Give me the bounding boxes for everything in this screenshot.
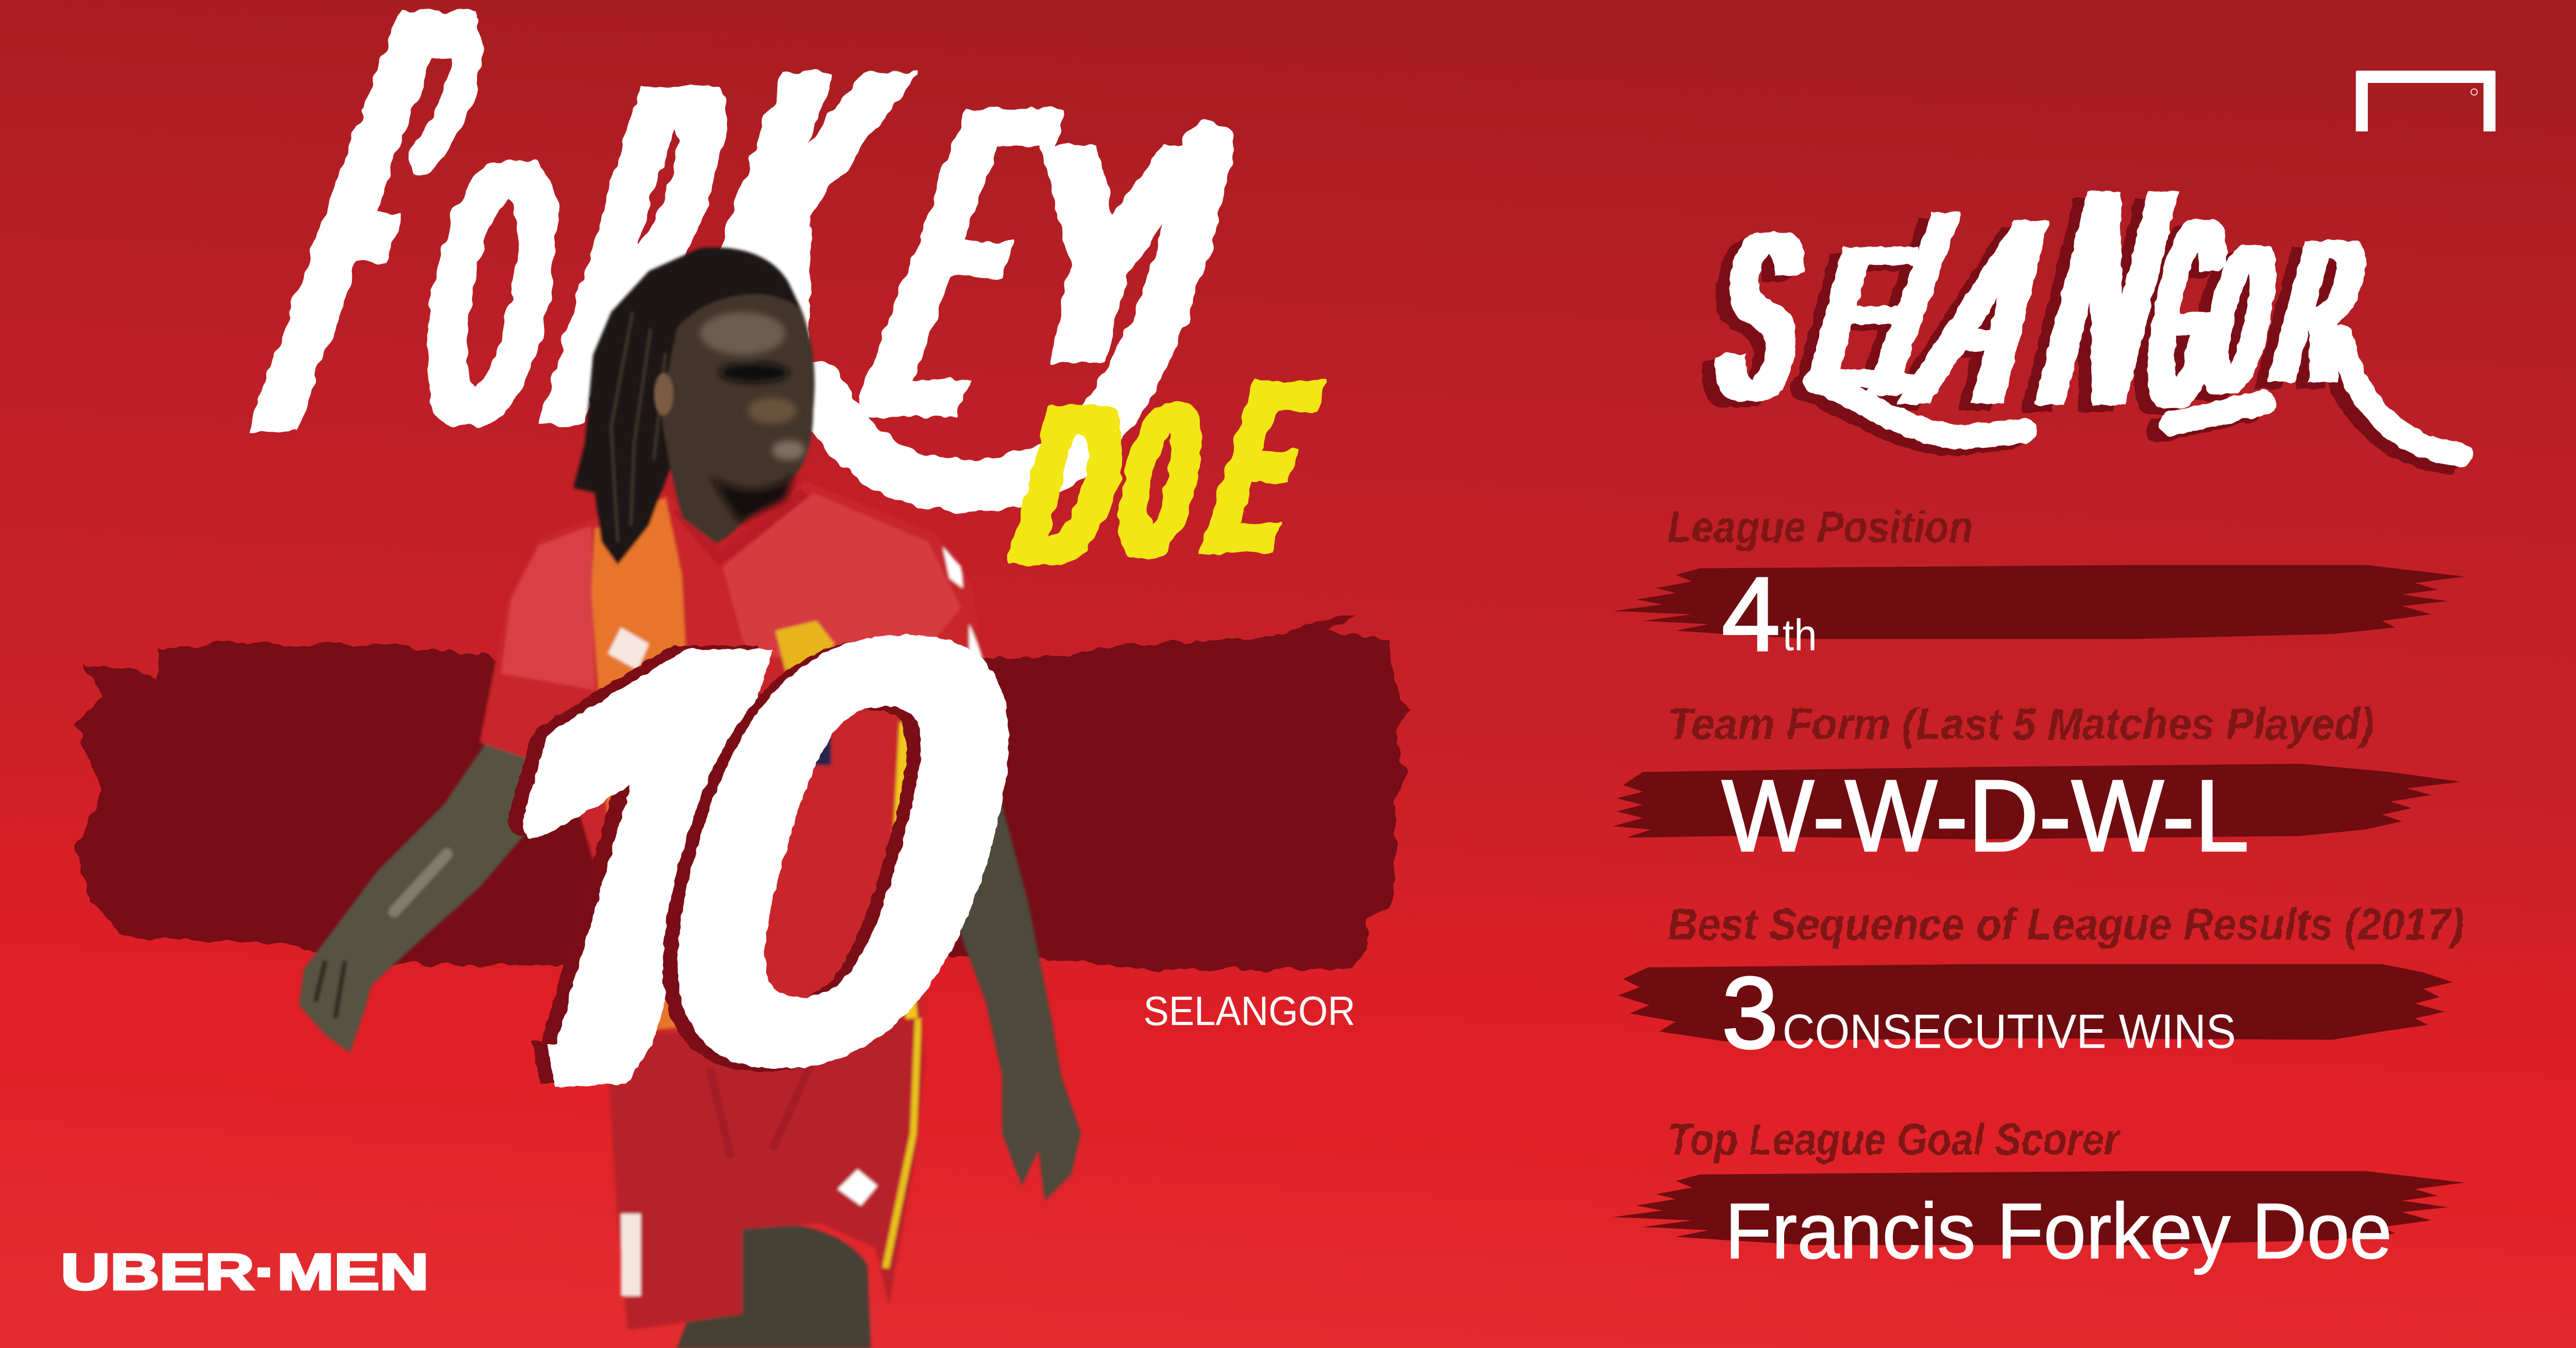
trademark (2471, 89, 2477, 95)
shadow E: E (1783, 211, 1914, 435)
brow and eyes (720, 363, 789, 383)
leg (677, 1224, 871, 1348)
cheek (748, 398, 797, 424)
shadow O: O (2177, 211, 2275, 442)
letter Y: Y (981, 79, 1228, 428)
side stripe (897, 723, 912, 1018)
letter O: O (1103, 360, 1217, 599)
left shoulder highlight (501, 525, 595, 690)
letter E: E (826, 14, 1092, 510)
shadow G: G (2121, 173, 2226, 467)
shadow letters (1695, 133, 2368, 476)
brush band (1613, 764, 2461, 839)
crest (775, 621, 835, 677)
value suffix: th (1783, 611, 1817, 660)
selangor caption: SELANGOR (1143, 988, 1355, 1034)
white shoulder trim (943, 547, 982, 681)
stat: top scorer (1613, 1115, 2464, 1275)
dark brush band behind player (74, 616, 1410, 969)
letter O: O (403, 86, 580, 499)
facial shading (700, 312, 805, 522)
title: Forkey (249, 8, 1234, 514)
value: Francis Forkey Doe (1725, 1187, 2392, 1275)
label: Best Sequence of League Results (2017) (1668, 900, 2464, 949)
brush band (1618, 964, 2453, 1042)
left arm (299, 742, 558, 1053)
sponsor (720, 723, 832, 765)
jersey (480, 481, 1006, 1035)
letter E: E (1184, 329, 1339, 604)
shorts stripe (886, 1015, 919, 1268)
brush band (1613, 1171, 2464, 1245)
uber men logo: UBER·MEN (61, 1243, 429, 1300)
white L: L (1848, 157, 2009, 450)
Y swash tail (817, 148, 1208, 486)
hair (573, 247, 802, 565)
white tails (1816, 337, 2461, 455)
title: Doe (994, 329, 1339, 612)
goal logo (2356, 71, 2496, 131)
right arm (945, 764, 1081, 1201)
letter D: D (994, 357, 1148, 612)
orange panel (591, 498, 690, 1032)
shadow A: A (1869, 171, 2087, 465)
shadow L: L (1834, 164, 1996, 457)
number 10 (507, 634, 1010, 1088)
white E: E (1796, 204, 1927, 429)
value number: 3 (1722, 955, 1778, 1069)
shorts (606, 1010, 925, 1330)
team name shadow (1695, 133, 2448, 476)
label: Team Form (Last 5 Matches Played) (1668, 699, 2374, 749)
team name white (1708, 127, 2461, 470)
beard (710, 473, 795, 522)
face and neck (660, 294, 815, 543)
goal frame (2356, 71, 2496, 131)
white S: S (1708, 185, 1813, 448)
white letters (1708, 127, 2381, 470)
collar (677, 493, 805, 558)
body shapes (299, 247, 1081, 1348)
stat: league position (1613, 502, 2464, 673)
shorts logo (838, 1169, 877, 1206)
shadow N: N (2004, 133, 2182, 476)
hand shadow (315, 961, 345, 1018)
white N: N (2018, 127, 2195, 470)
mouth (772, 440, 805, 460)
shorts number (621, 1214, 641, 1296)
chest highlight (723, 493, 961, 657)
white G: G (2134, 166, 2240, 460)
white A: A (1883, 165, 2100, 458)
white digit 0: 0 (579, 514, 1108, 1188)
player photo illustration (299, 247, 1081, 1348)
white digit 1: 1 (370, 523, 914, 1276)
value: W-W-D-W-L (1722, 759, 2249, 873)
forehead (700, 312, 785, 355)
hair strands (611, 312, 665, 542)
stat: best sequence (1618, 900, 2464, 1069)
white R: R (2259, 198, 2381, 424)
F top hook (422, 26, 466, 158)
shadow tails (1802, 343, 2448, 462)
brush band (1613, 565, 2464, 639)
shadow digit 0: 0 (565, 517, 1093, 1191)
shadow R: R (2246, 204, 2368, 431)
arm highlight (394, 854, 447, 912)
shadow digit 1: 1 (355, 520, 900, 1273)
label: Top League Goal Scorer (1668, 1115, 2121, 1165)
ear (654, 373, 673, 416)
stat: team form (1613, 699, 2461, 873)
value text: CONSECUTIVE WINS (1783, 1004, 2236, 1058)
shadow S: S (1695, 192, 1800, 454)
white O: O (2190, 204, 2288, 435)
value: 4 (1722, 556, 1780, 673)
label: League Position (1668, 502, 1973, 552)
team name: Selangor (1695, 127, 2461, 476)
shorts crease (710, 1060, 813, 1158)
lotto chest logo (608, 627, 649, 670)
